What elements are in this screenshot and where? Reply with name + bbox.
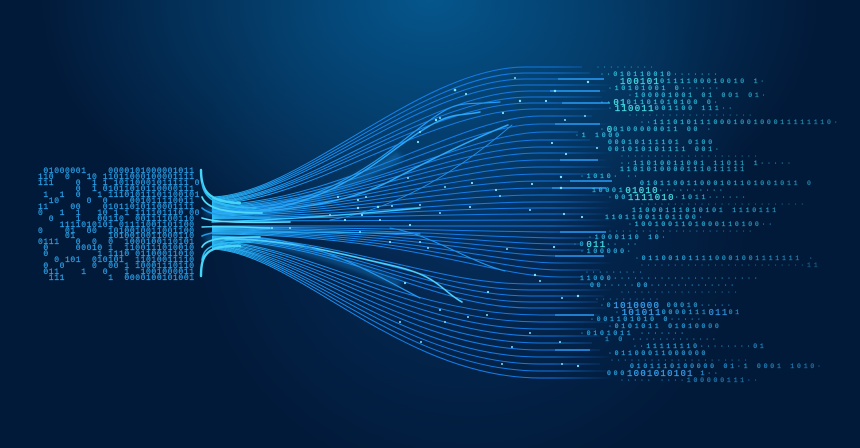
highlighted large binary digits, lower: 101011 bbox=[622, 308, 662, 318]
right binary stream bbox=[573, 64, 840, 384]
right binary stream: ··11111110········01 bbox=[633, 343, 767, 350]
left binary data block bbox=[38, 167, 200, 283]
right binary stream: 1101010000111011111 bbox=[620, 166, 747, 173]
right binary stream: ·100000· bbox=[580, 248, 633, 255]
left binary data block: 10 0 0 001011110011 bbox=[38, 197, 195, 206]
right binary stream: 001010101111 001· bbox=[608, 146, 722, 153]
right binary stream: 11011001101100· bbox=[605, 214, 705, 221]
right binary stream: 10001 ·········· bbox=[592, 187, 726, 194]
right binary stream: 0111100010010 1· bbox=[620, 78, 767, 85]
left binary data block: 1 1 0 1 11101011101100101 bbox=[38, 191, 200, 200]
left binary data block: 0 1 1110 01100011010 bbox=[38, 250, 195, 259]
right binary stream: · 0000111 01 bbox=[615, 309, 742, 316]
highlighted large binary digits, lower: 1010000 bbox=[613, 301, 660, 311]
right binary stream: · 001100 111·· bbox=[608, 105, 735, 112]
left binary data block: 0 0 0 00 1 10001110110 bbox=[38, 262, 195, 271]
left binary data block: 0 101 010101 11010011110 bbox=[38, 256, 195, 265]
right binary stream: ·1001001101000110100·· bbox=[628, 221, 775, 228]
right binary stream: ········· bbox=[596, 64, 656, 71]
central glow bbox=[205, 155, 400, 284]
right binary stream: ·· 01101010100 0· bbox=[600, 99, 720, 106]
right binary stream: 000 1·· bbox=[607, 370, 721, 377]
glowing particles bbox=[271, 77, 598, 367]
bright highlighted strands bbox=[212, 102, 512, 302]
right binary stream: ····················· bbox=[610, 357, 750, 364]
highlighted large binary digits, upper: 01010 bbox=[625, 186, 659, 196]
left binary data block: 01 1010010011000110 bbox=[38, 232, 195, 241]
highlighted large binary digits, upper: 110011 bbox=[615, 104, 655, 114]
right fade bbox=[660, 0, 860, 448]
right binary stream: ··111010111000100100011111110· bbox=[640, 119, 840, 126]
right binary stream: · 0100000011 00 · bbox=[600, 126, 714, 133]
left binary data block: 0 1 00110 00111100110 bbox=[38, 215, 195, 224]
right binary stream: ····················· bbox=[620, 153, 760, 160]
highlighted large binary digits, upper: 011 bbox=[586, 240, 606, 250]
right binary stream: 11000111010101 1110111 bbox=[632, 207, 779, 214]
right binary stream: ·························11 bbox=[640, 262, 820, 269]
right binary stream: ························· bbox=[640, 201, 807, 208]
left binary data block: 0 00010 1 1100111010010 bbox=[38, 244, 195, 253]
right binary stream: ·1010· ·· bbox=[580, 173, 640, 180]
highlighted large binary digits, upper: 1111010 bbox=[628, 193, 675, 203]
left binary data block: 111 1 0000100101001 bbox=[38, 274, 195, 283]
left binary data block: 0 1 1 10 1 1 111101110 00 bbox=[38, 209, 200, 218]
right binary stream: 0101110100000 01·1 0001 1010· bbox=[630, 363, 824, 370]
right binary stream: ·011001011110001001111111 · bbox=[635, 255, 815, 262]
right binary stream: ·10101001 0······ bbox=[608, 85, 722, 92]
highlighted large binary digits, lower: 011 bbox=[708, 308, 729, 318]
right binary stream: ·100001001 01 001 01· bbox=[628, 92, 768, 99]
right binary stream: ·001101010 0····· bbox=[590, 316, 704, 323]
top strand band bbox=[212, 67, 618, 207]
right binary stream: 00010111101 0100 bbox=[608, 139, 715, 146]
left binary data block: 01000001 0000101000001011 bbox=[38, 167, 195, 176]
left binary data block: 0 1 01011010110000111 bbox=[38, 185, 195, 194]
right binary stream: ··010110010······· bbox=[600, 71, 720, 78]
right binary stream: ··················· bbox=[628, 112, 755, 119]
right binary stream: ··11010011001 11011 1····· bbox=[620, 160, 794, 167]
right binary stream: ·0101011 01010000 bbox=[608, 323, 722, 330]
right binary stream: ·1000110 10· bbox=[588, 234, 668, 241]
highlighted large binary digits, upper: 0 bbox=[607, 125, 613, 135]
highlighted large binary digits, lower: 1001010101 bbox=[627, 369, 694, 379]
right binary stream: 1 0 ············· bbox=[605, 336, 719, 343]
left binary data block: 0 01 00 1010010011001100 bbox=[38, 227, 195, 236]
left binary data block: 110 0 10 11011000100001111 bbox=[38, 173, 195, 182]
left binary data block: 1111010101 01111001101100 bbox=[38, 221, 195, 230]
right binary stream: ·0101011 ······· bbox=[580, 330, 687, 337]
right binary stream: ······················ bbox=[608, 228, 755, 235]
right binary stream: ·················· bbox=[620, 289, 740, 296]
left binary data block: 011 1 0 1 1001000011 bbox=[38, 268, 195, 277]
right binary stream: 00·····00············· bbox=[590, 282, 737, 289]
right binary stream: ········· bbox=[585, 269, 645, 276]
highlighted large binary digits, lower bbox=[613, 301, 729, 379]
right binary stream: 11000······················ bbox=[580, 275, 760, 282]
left fan horns bbox=[201, 170, 290, 276]
left binary data block: 0111 0 0 0 1000100110101 bbox=[38, 238, 195, 247]
middle strand band bbox=[212, 140, 622, 226]
right binary stream: 010110011000101101001011 0 bbox=[640, 180, 814, 187]
highlighted large binary digits, upper: 01 bbox=[613, 98, 627, 108]
right binary stream: ·0 ·· ·· bbox=[573, 241, 640, 248]
right binary stream: ·1 1000 bbox=[575, 132, 622, 139]
right binary stream: ·00 ·1011······ bbox=[608, 194, 748, 201]
right binary stream: ····· ····100000111·· bbox=[620, 377, 760, 384]
right binary stream: ·········· bbox=[595, 296, 662, 303]
highlighted large binary digits, upper: 100101 bbox=[620, 77, 660, 87]
right binary stream: ·0 00010····· bbox=[600, 302, 734, 309]
left binary data block: 111 0 1 1 10110001011111 0 bbox=[38, 179, 200, 188]
bright line ends bbox=[550, 79, 612, 350]
left binary data block: 11 00 01011010110001111 bbox=[38, 203, 195, 212]
lower strand band bbox=[212, 227, 634, 378]
right binary stream: ·01100011000000 bbox=[608, 350, 708, 357]
highlighted large binary digits, upper bbox=[586, 77, 675, 250]
